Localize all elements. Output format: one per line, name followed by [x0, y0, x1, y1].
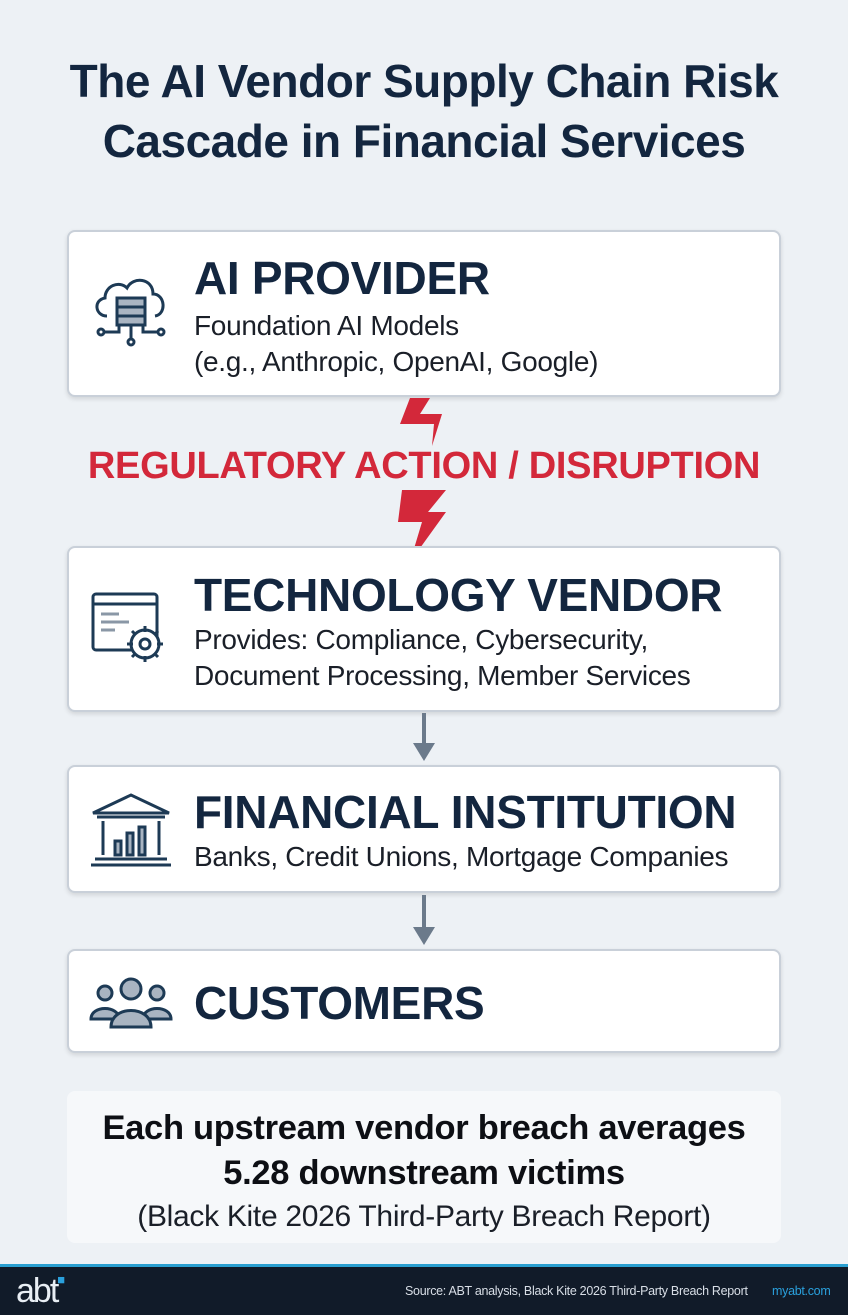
icon: bank — [91, 793, 171, 866]
panel: customers — [67, 949, 781, 1053]
arrow — [413, 713, 435, 761]
icon: cloud server — [95, 278, 166, 346]
warning label: REGULATORY ACTION / DISRUPTION — [88, 445, 760, 487]
arrow — [413, 895, 435, 945]
logo: abt■ — [16, 1272, 63, 1310]
panel: technology vendor — [67, 546, 781, 712]
title: The AI Vendor Supply Chain Risk — [70, 55, 778, 107]
heading: FINANCIAL INSTITUTION — [194, 786, 736, 838]
website: myabt.com — [772, 1284, 830, 1298]
source text: Source: ABT analysis, Black Kite 2026 Third-Party Breach Report — [405, 1284, 748, 1298]
description — [194, 310, 598, 377]
icon: lightning bolt lower — [398, 490, 446, 546]
description: Foundation AI Models — [194, 310, 459, 341]
heading: TECHNOLOGY VENDOR — [194, 569, 722, 621]
callout: statistic: 5.28 downstream victims — [223, 1154, 625, 1192]
heading: AI PROVIDER — [194, 252, 490, 304]
footer — [0, 1264, 848, 1315]
description — [194, 624, 690, 691]
description: Document Processing, Member Services — [194, 660, 690, 691]
icon: browser gear — [92, 592, 163, 662]
description: Provides: Compliance, Cybersecurity, — [194, 624, 648, 655]
title: Cascade in Financial Services — [103, 115, 745, 167]
description: Banks, Credit Unions, Mortgage Companies — [194, 841, 728, 872]
callout: statistic — [67, 1091, 781, 1243]
description: (e.g., Anthropic, OpenAI, Google) — [194, 346, 598, 377]
panel: AI provider — [67, 230, 781, 397]
icon: people — [90, 978, 172, 1028]
heading: CUSTOMERS — [194, 977, 484, 1029]
callout: statistic: Each upstream vendor breach averages — [102, 1109, 746, 1147]
panel: financial institution — [67, 765, 781, 893]
title — [70, 55, 779, 167]
icon: lightning bolt upper — [400, 398, 442, 446]
callout: statistic: (Black Kite 2026 Third-Party Breach Report) — [137, 1200, 711, 1233]
